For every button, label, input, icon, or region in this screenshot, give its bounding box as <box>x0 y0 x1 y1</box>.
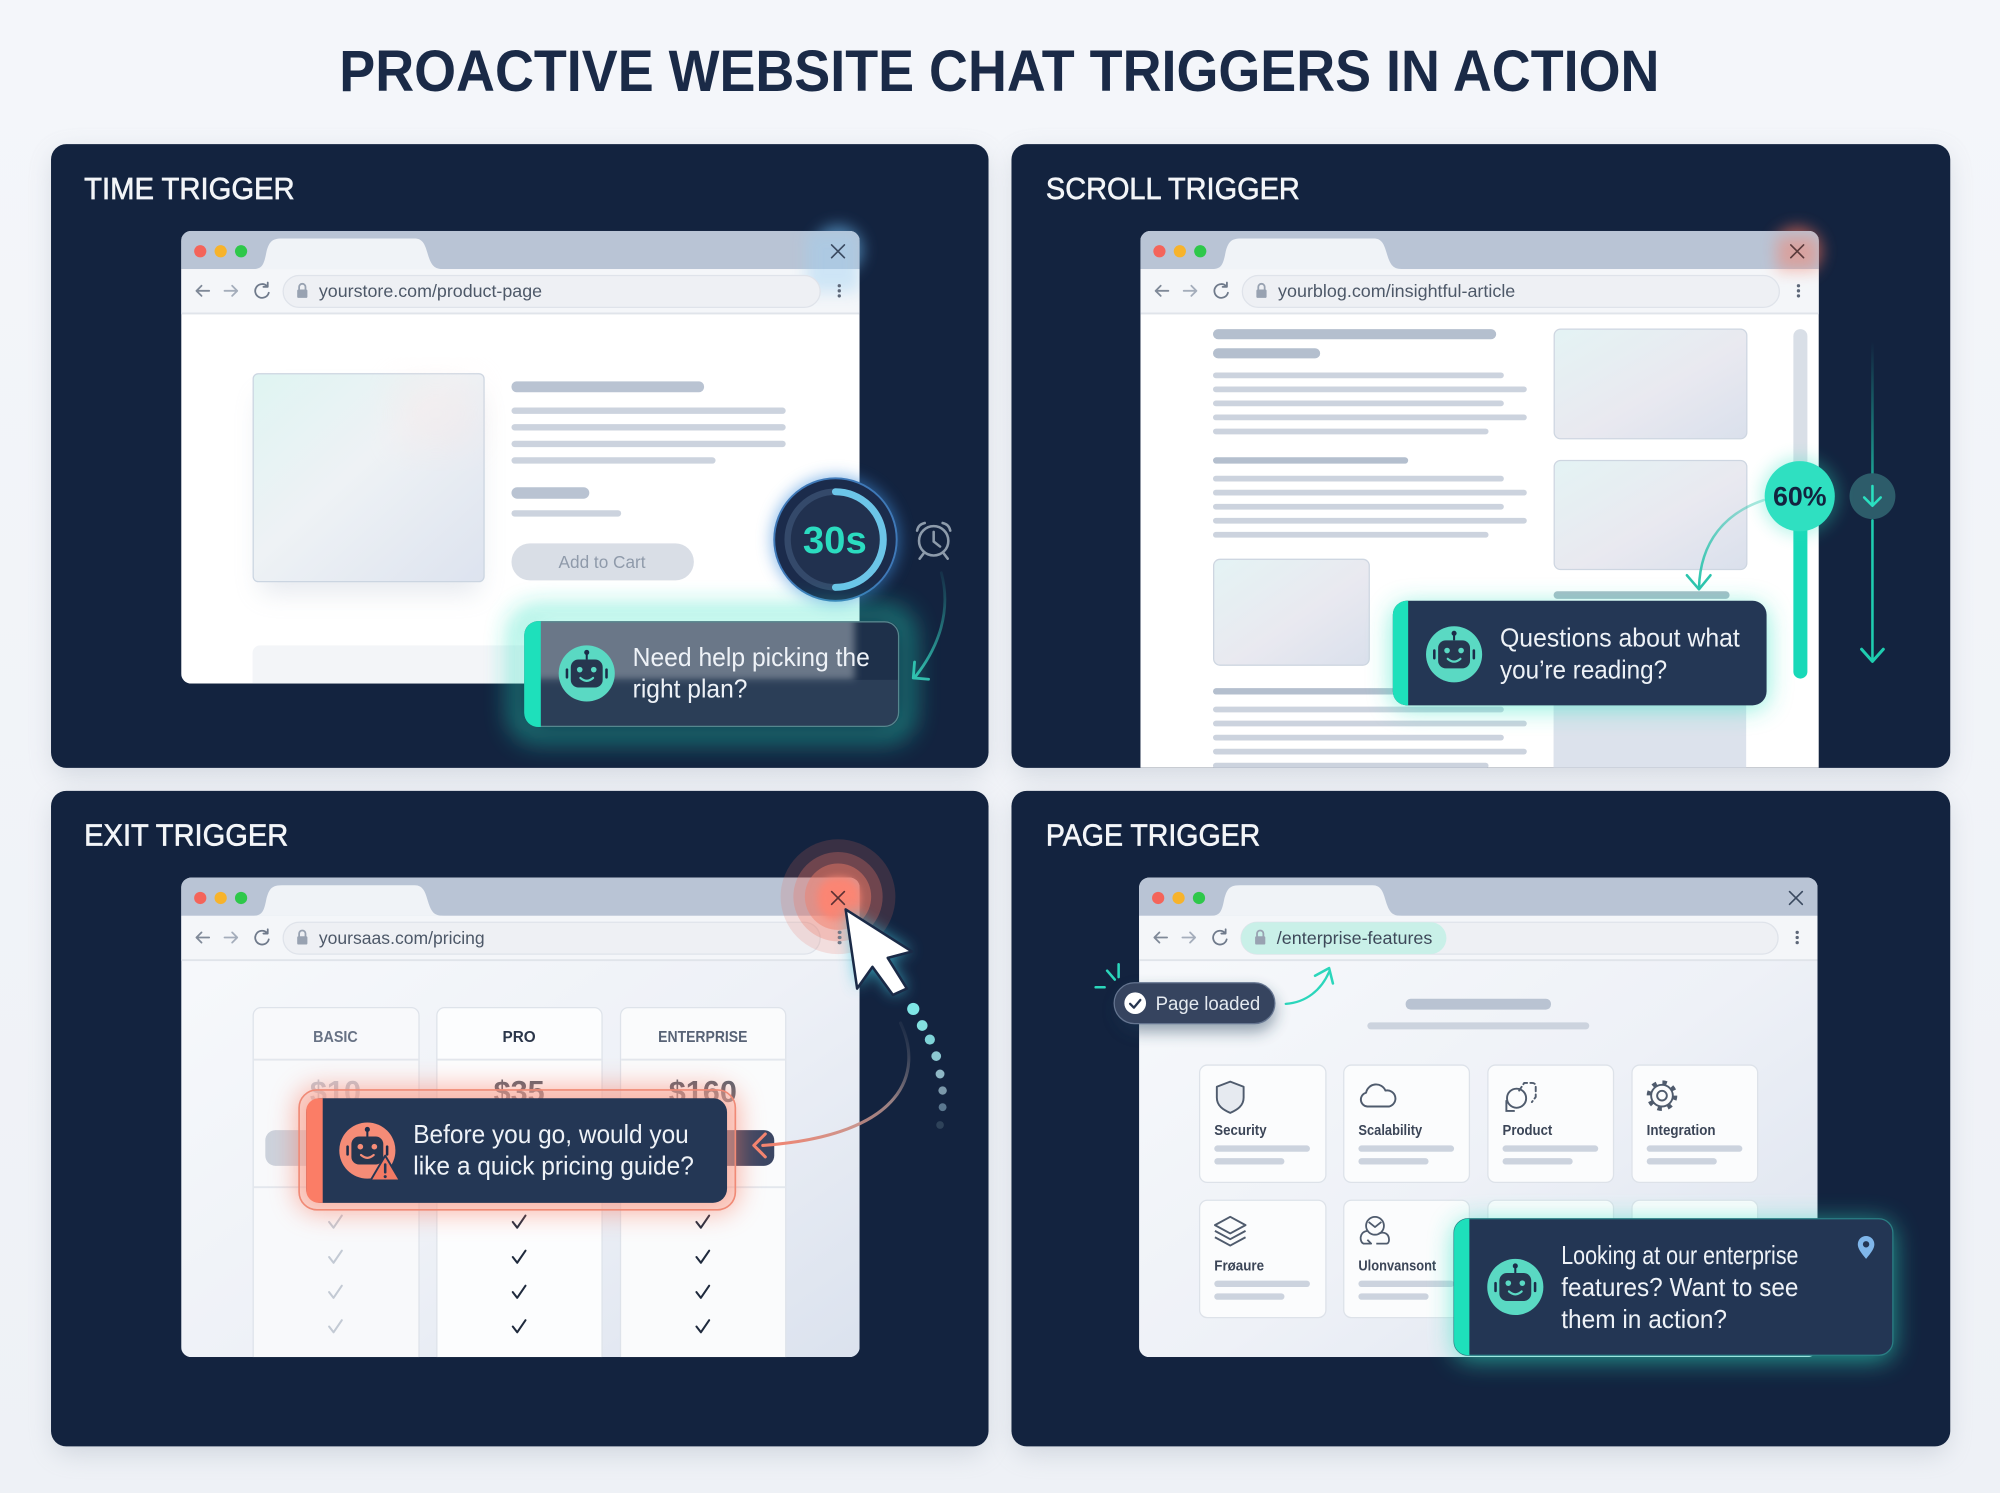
pricing column: basic <box>253 1008 419 1378</box>
chat bubble: page <box>1454 1219 1893 1360</box>
chat bubble: scroll <box>1393 601 1767 708</box>
bubble text: you’re reading? <box>1500 657 1667 685</box>
feature card: security: Security <box>1214 1123 1267 1139</box>
feature card: product <box>1488 1065 1614 1182</box>
feature card: ulonvansont <box>1344 1200 1469 1318</box>
chat bubble: time <box>510 599 906 733</box>
feature card: integration <box>1632 1065 1758 1182</box>
checkmarks <box>329 1216 709 1332</box>
pricing column: basic: $10 <box>310 1075 361 1109</box>
icon: robot <box>1426 626 1482 682</box>
article text placeholders <box>1213 329 1527 769</box>
bubble text: Need help picking the <box>633 644 870 672</box>
browser window: features <box>1139 878 1818 1357</box>
browser window: pricing <box>181 878 860 1378</box>
page loaded badge <box>1096 964 1333 1032</box>
bubble text: features? Want to see <box>1561 1274 1798 1302</box>
pricing column: basic: BASIC <box>313 1029 358 1046</box>
icon: robot <box>559 645 615 702</box>
image placeholders <box>1554 329 1747 439</box>
pricing column: pro: $35 <box>494 1075 545 1109</box>
feature card: product: Product <box>1503 1123 1552 1139</box>
arrow: badge to bubble <box>1687 500 1764 589</box>
cursor <box>846 909 912 995</box>
icon: alarm clock <box>917 523 950 559</box>
badge: 60 percent: 60% <box>1773 482 1827 512</box>
scrollbar track <box>1793 329 1808 462</box>
feature card: scalability: Scalability <box>1358 1123 1423 1139</box>
browser window: article <box>1140 231 1819 784</box>
feature card: integration: Integration <box>1647 1123 1716 1139</box>
arrow: cursor to bubble <box>754 1023 909 1157</box>
feature card: ulonvansont: Ulonvansont <box>1358 1258 1436 1274</box>
arrow: timer to bubble <box>913 573 945 679</box>
panel: exit trigger <box>51 791 989 1454</box>
add to cart button: Add to Cart <box>559 552 646 572</box>
bubble text: them in action? <box>1561 1306 1727 1334</box>
panel: scroll trigger <box>1011 144 1950 784</box>
pricing column: pro: PRO <box>503 1029 536 1046</box>
feature card: scalability <box>1344 1065 1469 1182</box>
icon: location pin <box>1858 1236 1874 1259</box>
timer badge <box>772 476 899 603</box>
url text: /enterprise-features <box>1277 928 1432 948</box>
scroll progress fill <box>1793 504 1807 679</box>
pricing column: pro <box>437 1008 602 1378</box>
url text: yoursaas.com/pricing <box>319 928 485 948</box>
close button glow <box>1773 227 1821 276</box>
heading: scroll trigger: SCROLL TRIGGER <box>1046 172 1300 206</box>
arrow: scroll down <box>1849 342 1895 661</box>
pricing column: enterprise <box>621 1008 786 1378</box>
heading: page trigger: PAGE TRIGGER <box>1046 819 1260 853</box>
cta button: basic <box>265 1130 306 1166</box>
url text: yourblog.com/insightful-article <box>1278 281 1515 301</box>
feature cards hidden behind bubble <box>1488 1200 1758 1218</box>
pricing column: enterprise: ENTERPRISE <box>658 1029 747 1046</box>
heading: exit trigger: EXIT TRIGGER <box>84 819 288 853</box>
add to cart button <box>511 543 694 580</box>
bubble text: Questions about what <box>1500 625 1740 653</box>
feature card: security <box>1200 1065 1326 1182</box>
feature card: froaure: Frøaure <box>1214 1258 1264 1274</box>
close button pulse <box>781 839 895 954</box>
icon: robot <box>1487 1259 1543 1315</box>
page loaded badge: Page loaded <box>1156 994 1260 1015</box>
timer badge: 30s <box>803 519 867 562</box>
browser window: product page <box>181 231 860 696</box>
pricing column: enterprise: $160 <box>669 1075 737 1109</box>
url highlight <box>1241 922 1446 954</box>
bubble text: Before you go, would you <box>413 1121 689 1149</box>
motion trail dots <box>907 1003 947 1129</box>
chat bubble: exit <box>296 1087 739 1213</box>
panel: page trigger <box>1011 791 1950 1454</box>
bubble text: Looking at our enterprise <box>1561 1242 1798 1270</box>
heading: time trigger: TIME TRIGGER <box>84 172 295 206</box>
title: PROACTIVE WEBSITE CHAT TRIGGERS IN ACTION <box>339 39 1659 104</box>
url text: yourstore.com/product-page <box>319 281 542 301</box>
bubble text: right plan? <box>633 676 747 704</box>
feature card: froaure <box>1200 1200 1326 1318</box>
icon: robot with warning <box>339 1122 400 1180</box>
dots on toolbar edge <box>838 931 842 944</box>
close button glow <box>814 226 862 274</box>
panel: time trigger <box>51 144 989 776</box>
cta button: enterprise <box>727 1130 774 1166</box>
badge: 60 percent <box>1760 457 1839 536</box>
bubble text: like a quick pricing guide? <box>413 1153 694 1181</box>
product image placeholder <box>253 374 484 582</box>
